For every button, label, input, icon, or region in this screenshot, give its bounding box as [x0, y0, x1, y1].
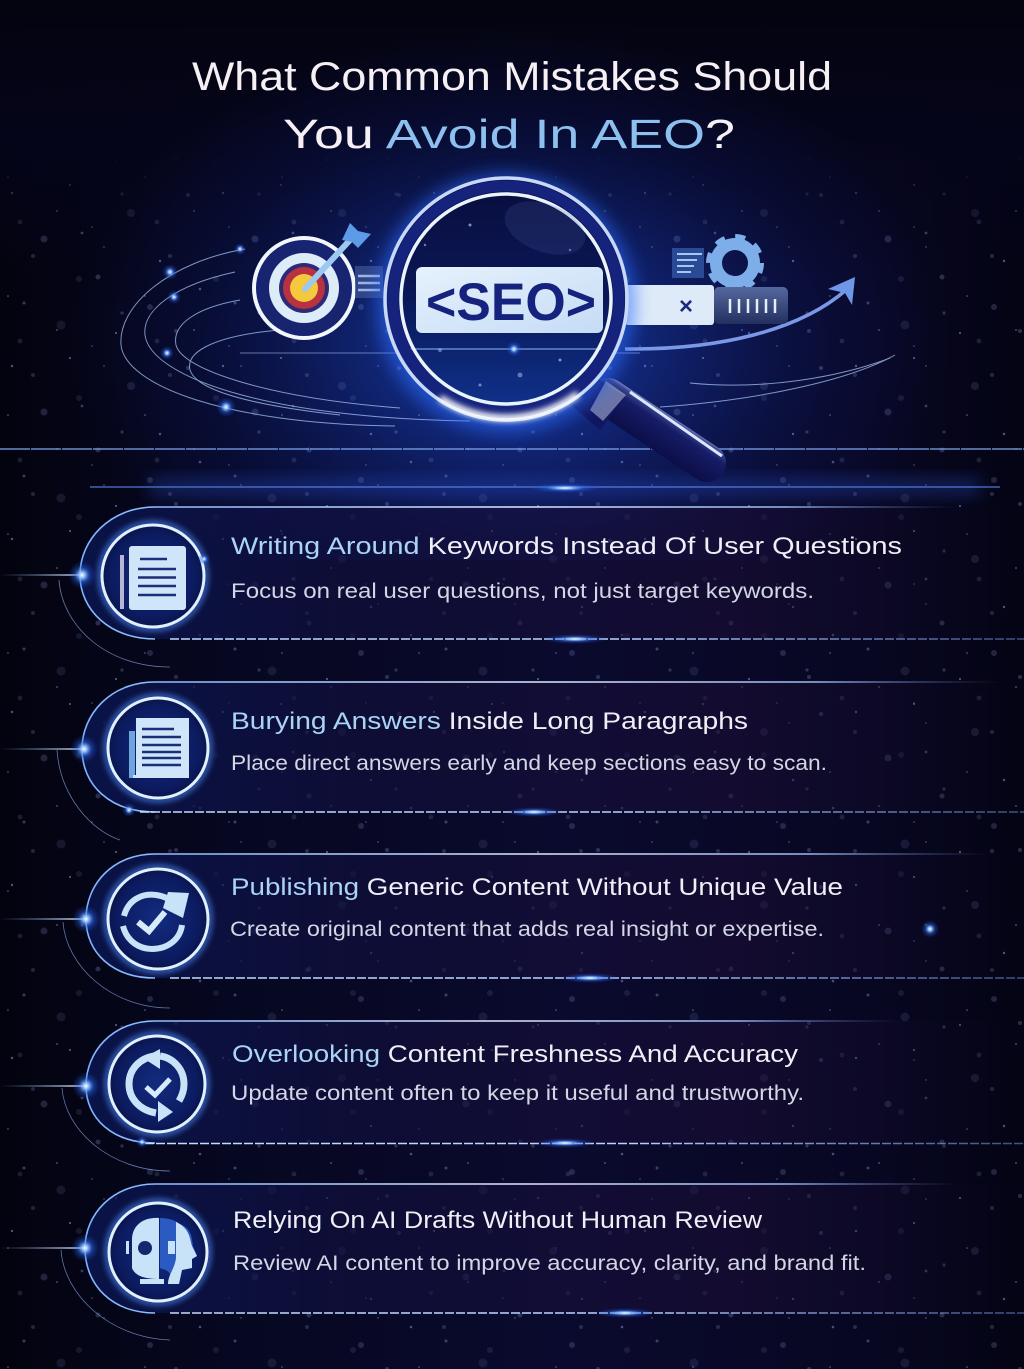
- search bar: dark ticks: [714, 287, 788, 324]
- icon: refresh arrow with check: [106, 867, 210, 971]
- orbit lines: [121, 249, 895, 426]
- orbit sparkles: [160, 243, 246, 417]
- description: Focus on real user questions, not just target keywords.: [231, 580, 814, 603]
- icon: document behind gear: [672, 248, 704, 278]
- heading: Publishing Generic Content Without Unique Value: [231, 874, 843, 901]
- SEO tag: <SEO>: [426, 273, 596, 332]
- search bar: close field: ×: [679, 293, 693, 320]
- sparkle: lens flare right: [921, 920, 939, 938]
- heading: Overlooking Content Freshness And Accuracy: [232, 1041, 798, 1068]
- description: Create original content that adds real insight or expertise.: [230, 918, 824, 941]
- description: Update content often to keep it useful and trustworthy.: [231, 1082, 804, 1105]
- search bar: close field: [625, 285, 714, 325]
- panel: AI drafts: [0, 1184, 1024, 1340]
- title: What Common Mistakes Should: [192, 55, 832, 99]
- icon: gear: [709, 237, 761, 289]
- heading: Relying On AI Drafts Without Human Review: [233, 1207, 763, 1234]
- magnifier lens and rim: [376, 173, 636, 433]
- icon: circular arrows with check: [107, 1034, 207, 1134]
- hero illustration: search magnifier, target and SEO bar: [121, 173, 895, 463]
- heading: Writing Around Keywords Instead Of User Questions: [231, 533, 902, 560]
- description: Review AI content to improve accuracy, clarity, and brand fit.: [233, 1252, 866, 1275]
- panel: buried answers: [0, 682, 1024, 840]
- title: [192, 55, 832, 157]
- panel: keywords vs questions: [0, 507, 1024, 667]
- description: Place direct answers early and keep sections easy to scan.: [231, 752, 827, 775]
- icon: half robot half human head: [107, 1201, 209, 1303]
- panel: generic content: [0, 854, 1024, 1008]
- title: You Avoid In AEO ?: [283, 111, 735, 157]
- hero divider lines: [0, 449, 1024, 496]
- magnifier handle: [565, 371, 722, 463]
- icon: stacked paper: [106, 696, 210, 800]
- heading: Burying Answers Inside Long Paragraphs: [231, 708, 748, 735]
- arrow: upward growth curve: [625, 277, 855, 349]
- icon: target with arrow: [252, 223, 383, 340]
- panel: freshness and accuracy: [0, 1021, 1024, 1171]
- icon: document with pen: [100, 523, 210, 629]
